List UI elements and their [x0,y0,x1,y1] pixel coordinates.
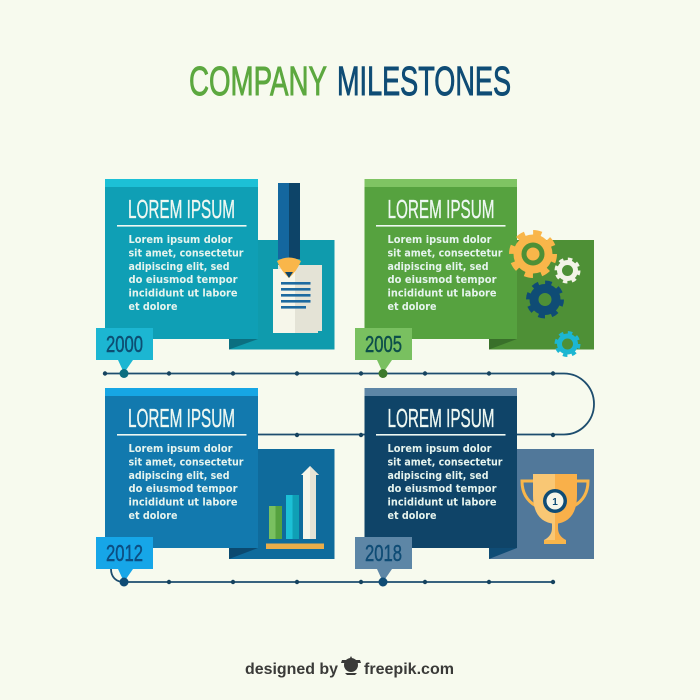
text block: 2005: et dolore [388,300,436,313]
text block: 2005: sit amet, consectetur [388,246,503,260]
heading: 2012: LOREM IPSUM [128,403,235,433]
icon: navy gear [528,282,562,316]
icon: orange gear [512,232,554,276]
panel: 2005 [355,179,594,378]
text block: 2018: do eiusmod tempor [388,482,497,495]
timeline node: 2005 [378,369,388,378]
timeline node: 2012 [120,578,128,586]
text block: 2012: do eiusmod tempor [128,482,238,495]
timeline node: 2000 [120,369,128,378]
text block: 2000: et dolore [128,300,178,313]
footer credit: designed by [245,661,338,678]
heading: 2000: LOREM IPSUM [128,194,235,224]
text block: 2012 [128,442,244,522]
footer credit [245,656,454,678]
text block: 2000: incididunt ut labore [128,286,238,300]
year tag: 2005: 2005 [365,331,402,357]
text block: 2012: Lorem ipsum dolor [128,442,233,455]
timeline node: 2018 [378,578,388,586]
timeline path [103,371,594,584]
text block: 2005: adipiscing elit, sed [388,260,488,273]
text block: 2018: sit amet, consectetur [388,456,503,468]
text block: 2012: et dolore [128,509,178,522]
heading: 2005: LOREM IPSUM [388,194,494,224]
year tag: 2000 [96,328,153,373]
year tag: 2018: 2018 [365,540,402,566]
icon: teal gear [556,332,579,356]
text block: 2012: incididunt ut labore [128,496,238,508]
text block: 2012: adipiscing elit, sed [128,469,230,482]
title: COMPANY [189,58,327,104]
icon: trophy [522,474,588,544]
year tag: 2000: 2000 [106,331,143,357]
bar chart [266,466,324,549]
heading: 2018: LOREM IPSUM [388,403,494,433]
year tag: 2012: 2012 [106,540,143,566]
year tag: 2018 [355,537,412,582]
text block: 2005: incididunt ut labore [388,286,496,300]
panel: 2018 [355,388,594,586]
text block: 2005: do eiusmod tempor [388,273,497,286]
title: MILESTONES [337,58,511,104]
text block: 2018: Lorem ipsum dolor [388,442,492,455]
text block: 2000: sit amet, consectetur [128,246,244,260]
text block: 2000 [128,233,244,313]
text block: 2000: Lorem ipsum dolor [128,233,233,246]
footer credit: freepik.com [364,661,454,678]
text block: 2012: sit amet, consectetur [128,456,244,468]
icon: pencil and paper [273,183,322,333]
text block: 2018: et dolore [388,509,436,522]
icon: trophy: 1 [552,497,558,508]
text block: 2018 [388,442,503,522]
text block: 2000: do eiusmod tempor [128,273,238,286]
text block: 2000: adipiscing elit, sed [128,260,230,273]
title [189,58,511,104]
panel: 2012 [96,388,334,586]
year tag: 2005 [355,328,412,373]
text block: 2018: incididunt ut labore [388,496,496,508]
icon: gears [512,232,579,356]
year tag: 2012 [96,537,153,582]
icon: freepik logo [341,656,361,675]
text block: 2005 [388,233,503,313]
panel: 2000 [96,179,334,378]
text block: 2005: Lorem ipsum dolor [388,233,492,246]
text block: 2018: adipiscing elit, sed [388,469,488,482]
icon: white gear [556,259,579,282]
